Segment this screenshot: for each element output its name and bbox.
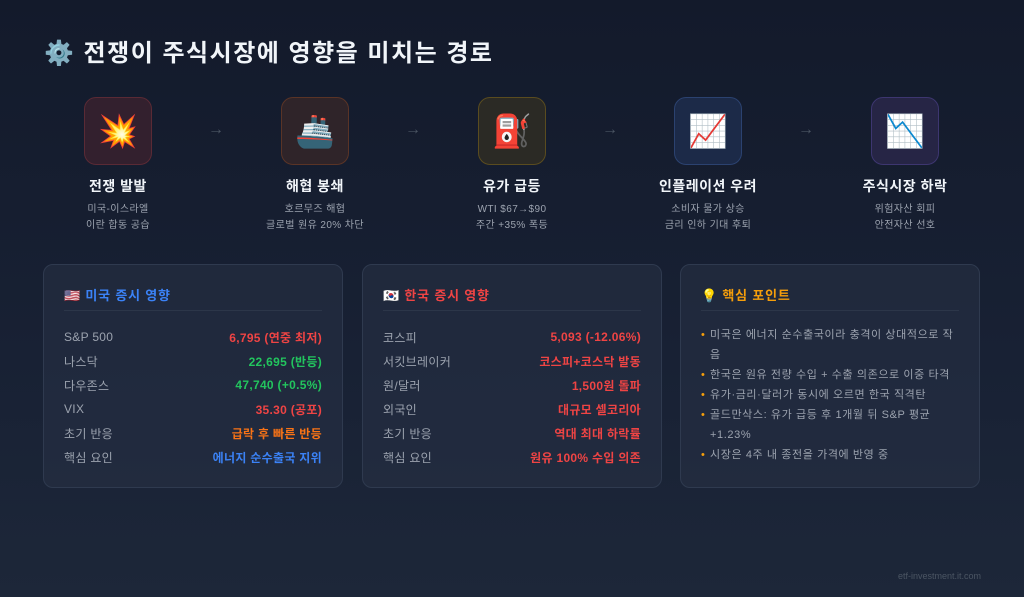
step: stock drop [863, 97, 947, 231]
panel: US market: 다우존스 [64, 378, 109, 392]
panel: US market: 핵심 요인 [64, 450, 113, 464]
footer: etf-investment.it.com [898, 571, 981, 581]
panel: Korea market: 초기 반응 [383, 426, 432, 440]
panel: key points: 골드만삭스: 유가 급등 후 1개월 뒤 S&P 평균 +1.23% [710, 409, 930, 441]
panel: US market: 초기 반응 [64, 426, 113, 440]
step: strait: 🚢 [295, 113, 335, 149]
panel: US market: 에너지 순수출국 지위 [213, 450, 322, 464]
panel: Korea market: 1,500원 돌파 [572, 378, 641, 392]
step: war: 미국-이스라엘 [87, 204, 149, 215]
step: war: 💥 [98, 113, 138, 149]
step: inflation: 소비자 물가 상승 [671, 204, 745, 215]
panel: US market [43, 264, 343, 488]
panel: Korea market [362, 264, 662, 488]
step: inflation [659, 97, 757, 231]
panel: key points: 유가·금리·달러가 동시에 오르면 한국 직격탄 [710, 389, 926, 401]
title: ⚙️ 전쟁이 주식시장에 영향을 미치는 경로 [44, 40, 494, 67]
arrow: → [208, 121, 224, 138]
step: oil: WTI $67→$90 [478, 204, 546, 215]
heading: 🇰🇷 한국 증시 영향 [383, 288, 490, 303]
panel: US market: VIX [64, 402, 84, 416]
panel: Korea market: 대규모 셀코리아 [558, 402, 641, 416]
panel: US market: 나스닥 [64, 354, 98, 368]
step: strait [266, 97, 364, 231]
heading [64, 285, 322, 311]
panel: key points: 한국은 원유 전량 수입 + 수출 의존으로 이중 타격 [710, 369, 950, 381]
step: oil: ⛽ [492, 113, 532, 149]
panel: Korea market: 5,093 (-12.06%) [550, 330, 641, 344]
panel: key points: 시장은 4주 내 종전을 가격에 반영 중 [710, 449, 889, 461]
panel: Korea market: 서킷브레이커 [383, 354, 451, 368]
panel: Korea market: 원/달러 [383, 378, 421, 392]
step: stock drop: 주식시장 하락 [863, 178, 947, 194]
panel: Korea market: 코스피 [383, 330, 417, 344]
step: war: 이란 합동 공습 [86, 220, 150, 231]
arrow: → [405, 121, 421, 138]
panel: Korea market: 코스피+코스닥 발동 [539, 354, 641, 368]
step: oil [476, 97, 548, 231]
panel: US market: 22,695 (반등) [249, 354, 322, 368]
step: stock drop: 위험자산 회피 [875, 204, 935, 215]
step: stock drop: 안전자산 선호 [875, 220, 935, 231]
heading [701, 285, 959, 311]
step: strait: 글로벌 원유 20% 차단 [266, 220, 364, 231]
panel: key points [680, 264, 980, 488]
step: war [84, 97, 152, 231]
arrow: → [602, 121, 618, 138]
step: war: 전쟁 발발 [89, 178, 147, 194]
panel: key points: 미국은 에너지 순수출국이라 충격이 상대적으로 작음 [710, 329, 953, 361]
step: stock drop: 📉 [885, 113, 925, 149]
heading [383, 285, 641, 311]
panel: US market: S&P 500 [64, 330, 113, 344]
step: oil: 유가 급등 [483, 178, 541, 194]
panel: Korea market: 역대 최대 하락률 [554, 426, 641, 440]
panel: Korea market: 핵심 요인 [383, 450, 432, 464]
arrow: → [798, 121, 814, 138]
panel: Korea market: 외국인 [383, 402, 417, 416]
panel: US market: 급락 후 빠른 반등 [232, 426, 322, 440]
heading: 💡 핵심 포인트 [701, 288, 791, 303]
step: oil: 주간 +35% 폭등 [476, 220, 548, 231]
step: inflation: 금리 인하 기대 후퇴 [665, 220, 751, 231]
heading: 🇺🇸 미국 증시 영향 [64, 288, 171, 303]
step: inflation: 인플레이션 우려 [659, 178, 757, 194]
panel: US market: 35.30 (공포) [256, 402, 322, 416]
panel: Korea market: 원유 100% 수입 의존 [530, 450, 641, 464]
panel: US market: 47,740 (+0.5%) [235, 378, 322, 392]
panel: US market: 6,795 (연중 최저) [229, 330, 322, 344]
step: inflation: 📈 [688, 113, 728, 149]
step: strait: 호르무즈 해협 [285, 204, 345, 215]
step: strait: 해협 봉쇄 [286, 178, 344, 194]
